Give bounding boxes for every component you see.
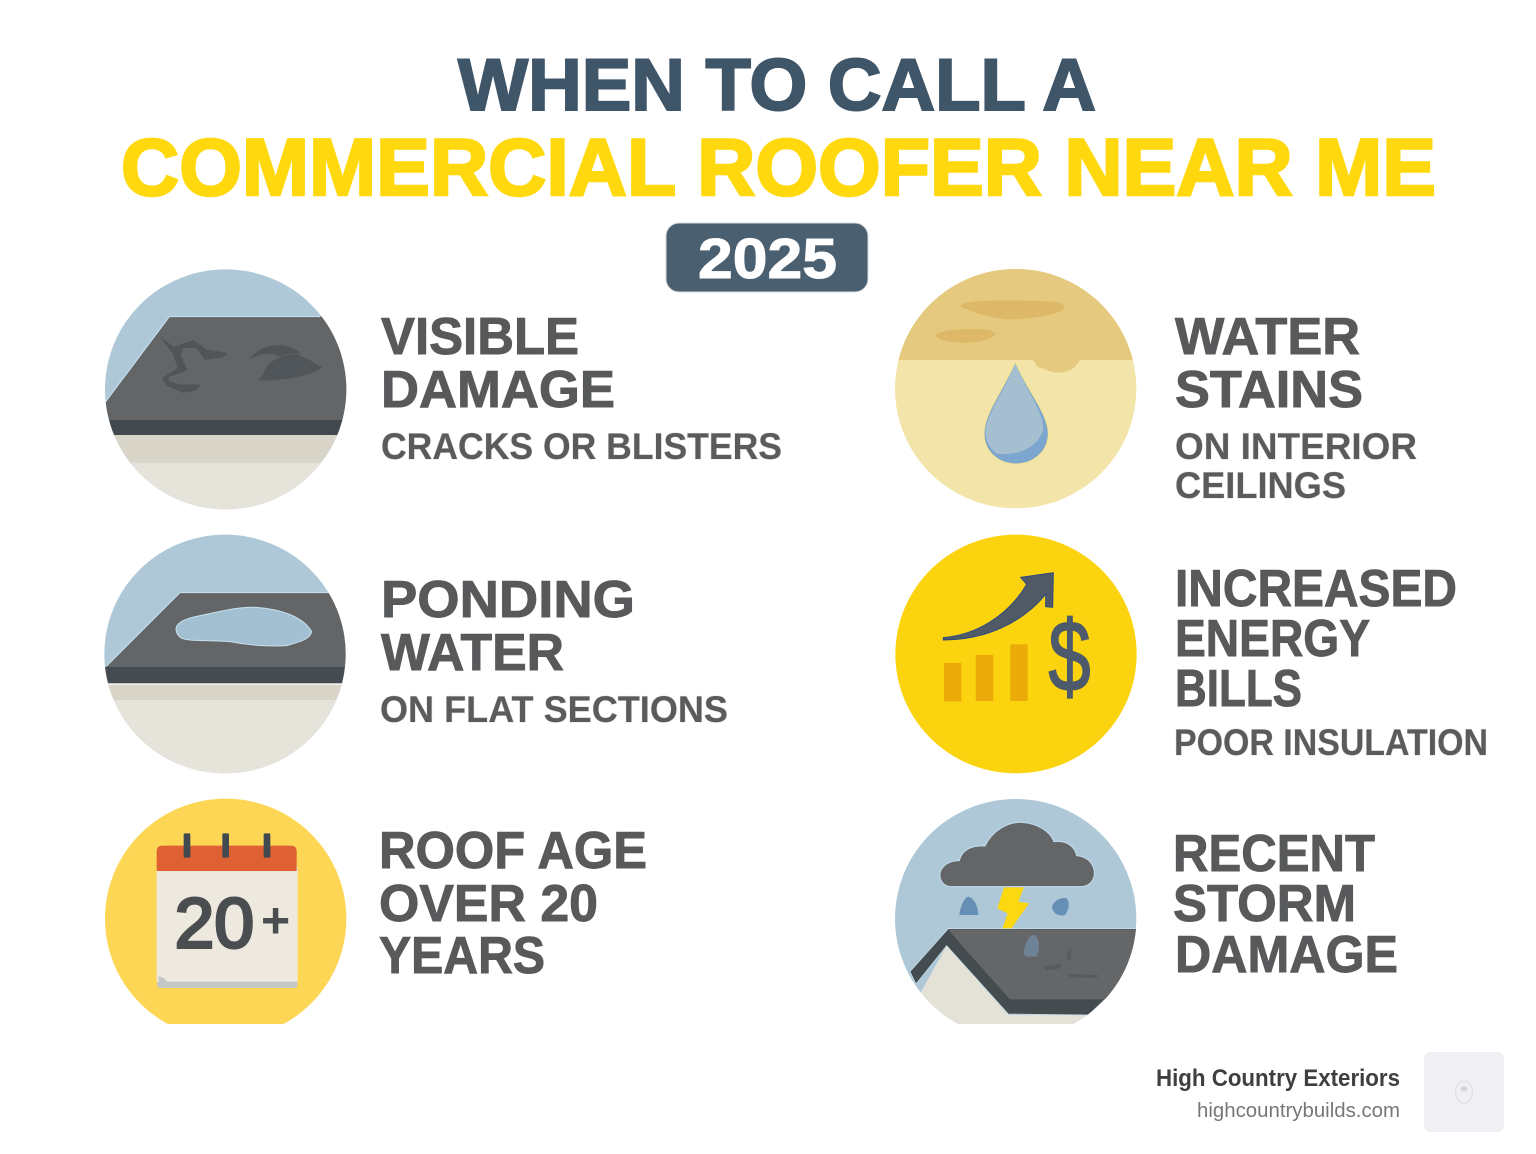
icon: rising cost chart: $ (1048, 601, 1091, 712)
icon: rising cost chart (895, 535, 1137, 773)
title: COMMERCIAL ROOFER NEAR ME (121, 123, 1436, 213)
subtext: cracks or blisters: CRACKS OR BLISTERS (381, 426, 782, 467)
heading: roof age over 20 years: YEARS (379, 927, 545, 985)
icon: ponding water on roof (104, 534, 346, 774)
heading: increased energy bills: INCREASED (1175, 560, 1457, 618)
subtext: on interior ceilings (1175, 426, 1417, 506)
panel: water stains (895, 269, 1417, 508)
footer brand text: highcountrybuilds.com (1197, 1100, 1400, 1122)
footer brand text (1156, 1065, 1400, 1122)
panel: visible damage (105, 269, 781, 510)
year badge: 2025 (698, 227, 837, 291)
icon: calendar 20+: 20 (175, 883, 254, 962)
heading: increased energy bills: BILLS (1175, 660, 1302, 718)
panel: ponding water (104, 534, 727, 774)
heading: visible damage (381, 308, 615, 419)
subtext: on interior ceilings: CEILINGS (1175, 465, 1346, 506)
heading: ponding water: WATER (381, 624, 564, 682)
heading: visible damage: DAMAGE (381, 361, 615, 419)
footer logo placeholder (1424, 1052, 1504, 1132)
title: WHEN TO CALL A (458, 45, 1096, 126)
icon: ceiling stain and water drop (895, 269, 1136, 508)
heading: water stains (1175, 308, 1363, 419)
heading: recent storm damage: STORM (1173, 875, 1356, 933)
panel: roof age (105, 799, 647, 1039)
heading: recent storm damage (1173, 825, 1398, 984)
heading: recent storm damage: RECENT (1173, 825, 1375, 883)
heading: increased energy bills (1175, 560, 1457, 718)
subtext: on interior ceilings: ON INTERIOR (1175, 426, 1417, 467)
icon: storm over roof (895, 799, 1136, 1024)
title (121, 45, 1436, 213)
heading: increased energy bills: ENERGY (1175, 610, 1370, 668)
panel: increased energy bills (895, 535, 1488, 773)
heading: recent storm damage: DAMAGE (1175, 926, 1398, 984)
subtext: poor insulation: POOR INSULATION (1174, 722, 1488, 763)
heading: roof age over 20 years: ROOF AGE (379, 822, 647, 880)
panel: recent storm damage (895, 799, 1396, 1024)
heading: water stains: WATER (1175, 308, 1360, 366)
icon: cracked roof (105, 269, 346, 510)
heading: ponding water: PONDING (381, 571, 635, 629)
heading: roof age over 20 years (379, 822, 647, 985)
footer brand text: High Country Exteriors (1156, 1065, 1400, 1092)
heading: ponding water (381, 571, 635, 682)
icon: calendar 20+: + (261, 893, 290, 949)
heading: water stains: STAINS (1175, 361, 1363, 419)
year badge (666, 223, 868, 292)
heading: roof age over 20 years: OVER 20 (379, 875, 598, 933)
heading: visible damage: VISIBLE (381, 308, 579, 366)
subtext: on flat sections: ON FLAT SECTIONS (380, 689, 728, 730)
icon: calendar 20+ (105, 799, 346, 1039)
